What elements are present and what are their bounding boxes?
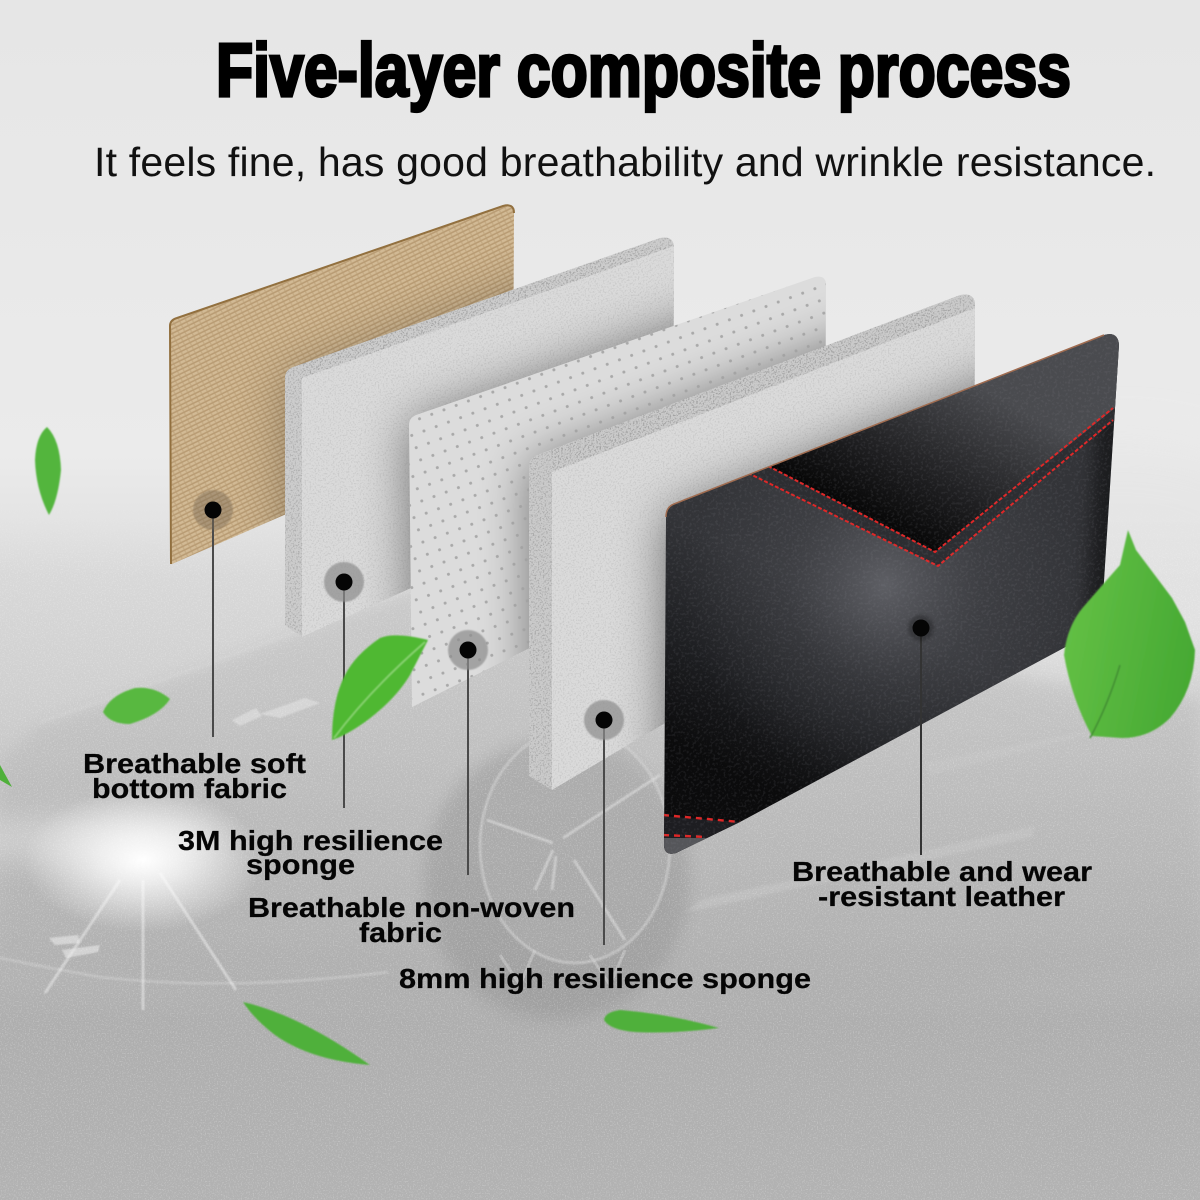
label: leather bbox=[792, 856, 1092, 912]
label: 3M sponge: 3M high resilience bbox=[178, 825, 443, 856]
icon: leaf bottom left bbox=[243, 1002, 370, 1065]
marker and leader line: leather bbox=[908, 615, 934, 855]
label: fabric bbox=[83, 748, 306, 804]
label: 3M sponge bbox=[178, 825, 443, 880]
layer: 3M high resilience sponge bbox=[285, 238, 674, 636]
icon: leaf bottom centre bbox=[604, 1010, 719, 1032]
label: 8mm sponge: 8mm high resilience sponge bbox=[399, 963, 811, 994]
icon: leaf small left bbox=[103, 688, 170, 724]
icon: leaf large right bbox=[1064, 530, 1195, 738]
icon: leaf edge left bbox=[0, 765, 12, 787]
marker and leader line: non-woven bbox=[448, 630, 488, 875]
label: non-woven: Breathable non-woven bbox=[248, 892, 575, 923]
label: non-woven bbox=[248, 892, 575, 948]
layer: 8mm high resilience sponge bbox=[529, 294, 975, 790]
marker and leader line: 8mm sponge bbox=[584, 700, 624, 945]
label: leather: Breathable and wear bbox=[792, 856, 1092, 887]
layer: breathable non-woven fabric bbox=[409, 276, 826, 707]
icon: leaf centre bbox=[332, 635, 428, 740]
label: 3M sponge: sponge bbox=[246, 849, 355, 880]
label: non-woven: fabric bbox=[359, 917, 442, 948]
subtitle: It feels fine, has good breathability and wrinkle resistance. bbox=[94, 139, 1156, 185]
label: leather: -resistant leather bbox=[818, 881, 1065, 912]
icon: leaf top left bbox=[35, 427, 61, 515]
label: fabric: bottom fabric bbox=[92, 773, 287, 804]
layer: breathable soft bottom fabric bbox=[169, 204, 515, 564]
marker and leader line: fabric bbox=[193, 490, 233, 737]
label: fabric: Breathable soft bbox=[83, 748, 306, 779]
marker and leader line: 3M sponge bbox=[324, 562, 364, 808]
layer: breathable wear-resistant leather bbox=[660, 330, 1125, 860]
